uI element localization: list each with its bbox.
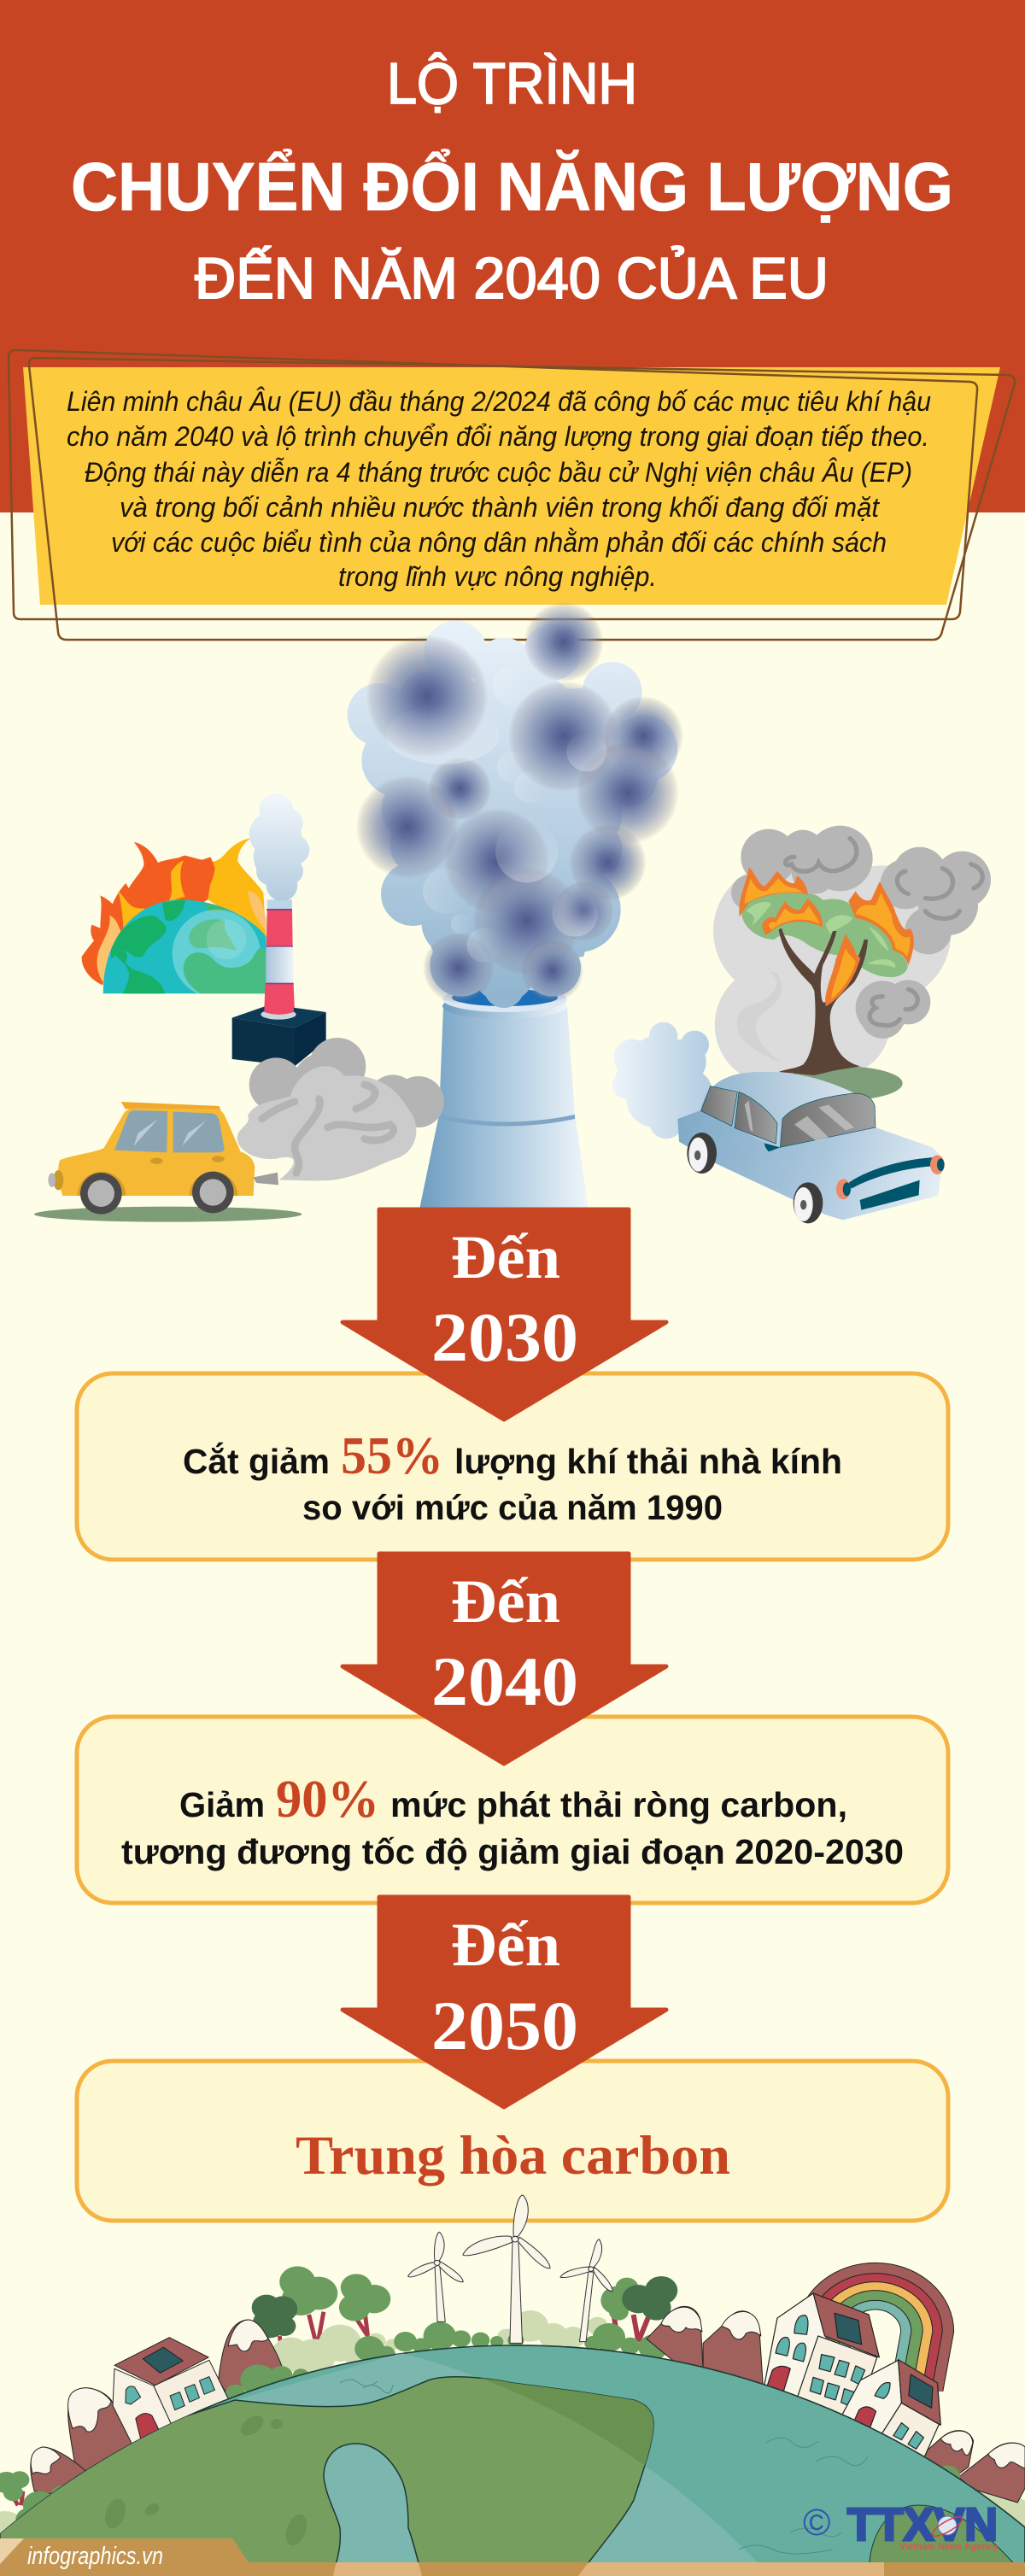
intro text: Động thái này diễn ra 4 tháng trước cuộc bầu cử Nghị viện châu Âu (EP): [85, 457, 912, 488]
green bushes right: [905, 2453, 973, 2497]
chimney base box: [232, 985, 326, 1066]
illustration: cooling tower: [419, 986, 589, 1209]
footer band: [0, 2538, 1025, 2576]
illustration: left hillside scenery: [0, 2266, 517, 2545]
large house: [764, 2293, 879, 2423]
intro text: Liên minh châu Âu (EU) đầu tháng 2/2024 đã công bố các mục tiêu khí hậu: [67, 386, 931, 417]
trees left: [0, 2266, 390, 2505]
turbine left: [408, 2232, 463, 2321]
copyright mark: ©: [803, 2502, 830, 2544]
heading: Đến 2040: [431, 1567, 578, 1720]
heading: Đến 2050: 2050: [431, 1987, 578, 2064]
text: 2030 target: 55%: [341, 1427, 443, 1485]
illustration: burning globe with small chimney and yellow car: [34, 793, 444, 1222]
illustration: wind turbines: [408, 2195, 612, 2343]
mountains right: [647, 2306, 1025, 2503]
small chimney smoke: [249, 793, 309, 901]
panel: 2030 target box: [77, 1373, 948, 1560]
grey exhaust smoke: [237, 1038, 444, 1180]
logo globe: [938, 2516, 957, 2535]
title line: CHUYỂN ĐỔI NĂNG LƯỢNG: CHUYỂN ĐỔI NĂNG LƯỢNG: [71, 149, 953, 225]
panel: 2040 target box: [77, 1717, 948, 1903]
ground patch: [783, 1066, 903, 1100]
arrow: 2050: [343, 1897, 666, 2107]
heading: Đến 2050: Đến: [451, 1911, 560, 1979]
trees and pale bushes: [507, 2276, 1025, 2531]
arrow: 2040: [343, 1554, 666, 1764]
heading: Đến 2030: [431, 1223, 578, 1376]
heading: Đến 2030: 2030: [431, 1298, 578, 1376]
text: 2040 target: tương đương tốc độ giảm giai đoạn 2020-2030: [121, 1832, 904, 1871]
panel: 2050 target box: [77, 2061, 948, 2221]
heading: Đến 2030: Đến: [451, 1223, 560, 1291]
hill behind logo: [869, 2504, 1013, 2562]
flames: [82, 838, 266, 985]
pale bushes: [0, 2325, 517, 2545]
car smoke: [612, 1022, 712, 1139]
blue car: [677, 1072, 945, 1223]
title: [71, 51, 953, 311]
tree trunk: [779, 928, 868, 1075]
text: 2030 target: Cắt giảm: [183, 1442, 330, 1481]
text: 2050 target: Trung hòa carbon: [296, 2125, 730, 2187]
heading: Đến 2040: 2040: [431, 1642, 578, 1720]
yellow callout background: [23, 367, 1000, 605]
land shading: [480, 2378, 653, 2466]
yellow car: [34, 1102, 302, 1222]
header band: [0, 0, 1025, 512]
intro text: với các cuộc biểu tình của nông dân nhằm phản đối các chính sách: [111, 527, 887, 558]
text: 2040 target: [121, 1771, 904, 1871]
illustration: large smoke plume: [348, 602, 683, 1008]
title line: ĐẾN NĂM 2040 CỦA EU: ĐẾN NĂM 2040 CỦA EU: [195, 245, 829, 311]
illustration: burning tree and blue car: [612, 826, 991, 1223]
agency name: Vietnam News Agency: [899, 2542, 999, 2552]
logo wordmark: TTXVN: [847, 2499, 998, 2550]
title line: LỘ TRÌNH: LỘ TRÌNH: [387, 51, 637, 116]
arrow: 2030: [343, 1209, 666, 1420]
water body: [0, 2345, 1025, 2576]
land spots: [102, 2412, 311, 2549]
text: 2040 target: 90%: [276, 1771, 379, 1829]
small chimney: [264, 899, 295, 1015]
callout outline 1: [9, 350, 977, 619]
ripples: [340, 2380, 868, 2554]
callout outline 2: [29, 358, 1015, 640]
text: 2030 target: lượng khí thải nhà kính: [454, 1442, 842, 1481]
heading: Đến 2040: Đến: [451, 1567, 560, 1636]
tree canopy: [741, 893, 908, 977]
panel: intro callout: [9, 350, 1015, 640]
heading: Đến 2050: [431, 1911, 578, 2064]
dark smoke clouds: [731, 826, 991, 1062]
pale smoke cloud: [713, 848, 951, 1085]
turbine centre: [463, 2195, 550, 2343]
text: 2040 target: mức phát thải ròng carbon,: [390, 1785, 847, 1824]
rainbow: [806, 2262, 955, 2392]
illustration: globe: [0, 2345, 1025, 2562]
text: 2030 target: so với mức của năm 1990: [302, 1488, 723, 1527]
illustration: right hillside scenery: [507, 2263, 1025, 2531]
land: [0, 2377, 653, 2576]
intro text: cho năm 2040 và lộ trình chuyển đổi năng lượng trong giai đoạn tiếp theo.: [67, 421, 929, 452]
logo: TTXVN: [803, 2499, 999, 2552]
intro text: trong lĩnh vực nông nghiệp.: [338, 561, 657, 592]
flames on tree: [739, 867, 914, 1006]
green bushes left: [15, 2321, 503, 2532]
logo orbit: [930, 2514, 964, 2539]
text: 2030 target: [183, 1427, 842, 1527]
small house: [840, 2360, 940, 2457]
intro text: và trong bối cảnh nhiều nước thành viên trong khối đang đối mặt: [120, 492, 880, 523]
intro text: [67, 386, 931, 592]
light water sweep: [0, 2353, 770, 2576]
source label: infographics.vn: [27, 2543, 163, 2570]
globe dome: [102, 899, 266, 994]
mountains left: [31, 2320, 283, 2494]
text: 2040 target: Giảm: [179, 1785, 265, 1824]
house left: [113, 2338, 229, 2451]
turbine right: [560, 2239, 612, 2342]
